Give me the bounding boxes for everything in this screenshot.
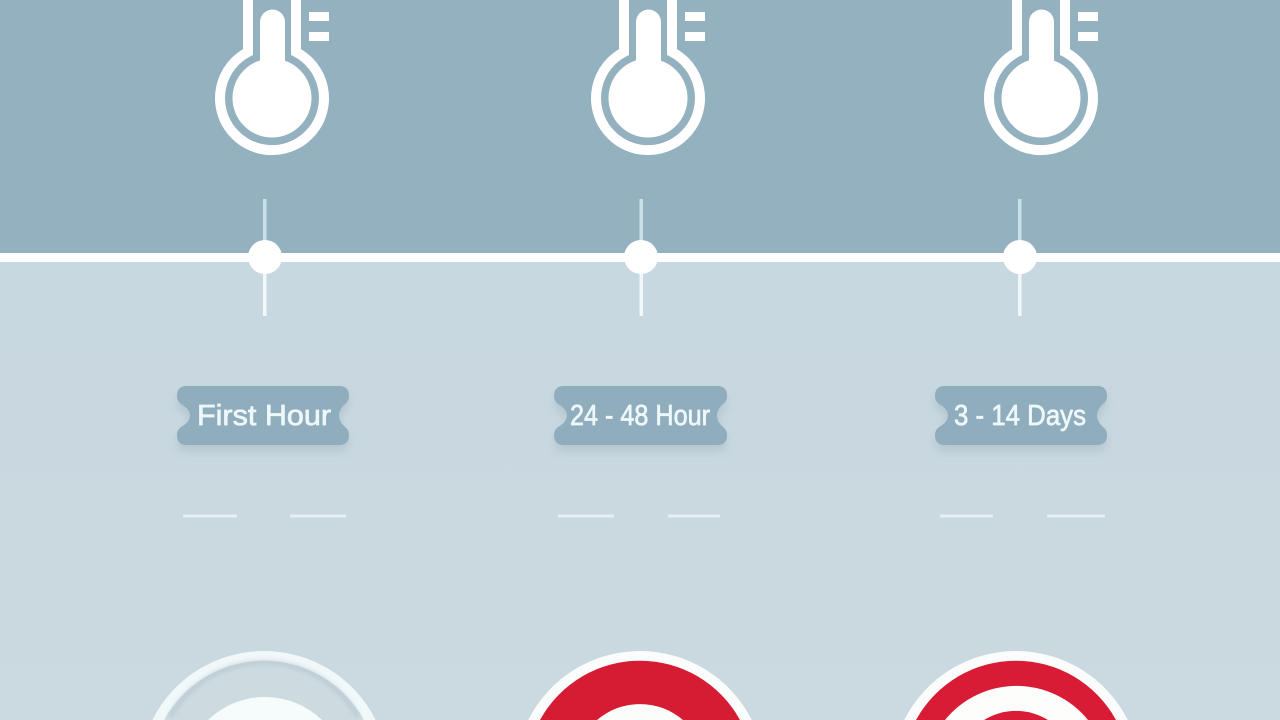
label badge: 3 - 14 Days (935, 386, 1107, 445)
label badge: 24 - 48 Hour (554, 386, 727, 445)
dashes under badge 2 (558, 514, 720, 518)
timeline axis (0, 253, 1280, 262)
target 2: red ring (528, 651, 752, 720)
target 1: pale (152, 651, 376, 720)
target 3: red double ring (904, 651, 1128, 720)
icon: thermometer 3 (989, 0, 1098, 150)
icon: thermometer 2 (596, 0, 705, 150)
lower band background (0, 257, 1280, 720)
label badge: 24 - 48 Hour: 24 - 48 Hour (570, 400, 710, 432)
top band background (0, 0, 1280, 257)
timeline node 2 (624, 199, 658, 316)
dashes under badge 3 (940, 514, 1105, 518)
icon: thermometer 1 (220, 0, 329, 150)
timeline node 3 (1003, 199, 1037, 316)
label badge: First Hour (177, 386, 349, 445)
label badge: First Hour: First Hour (197, 400, 331, 432)
dashes under badge 1 (183, 514, 346, 518)
label badge: 3 - 14 Days: 3 - 14 Days (954, 400, 1086, 432)
timeline node 1 (248, 199, 282, 316)
